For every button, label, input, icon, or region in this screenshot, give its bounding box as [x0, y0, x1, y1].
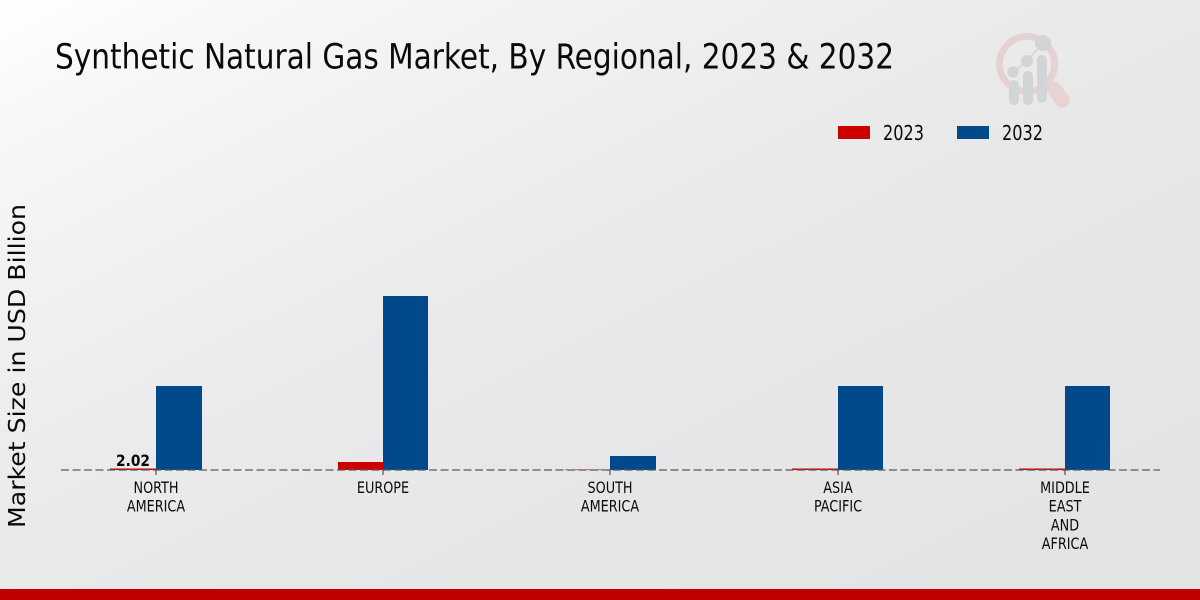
label: South America: SOUTH — [588, 478, 632, 497]
legend item: 2032 — [957, 121, 1043, 145]
label: Middle East and Africa: EAST — [1049, 497, 1082, 516]
x-axis category labels — [127, 478, 1090, 553]
bars: South America — [565, 456, 656, 470]
legend item: 2032: 2032 — [1002, 121, 1043, 145]
bars: Middle East and Africa — [1019, 386, 1110, 470]
label: North America: NORTH — [134, 478, 178, 497]
bars: North America — [110, 386, 202, 470]
title: Synthetic Natural Gas Market, By Regional, 2023 & 2032 — [55, 38, 894, 78]
label: Middle East and Africa: MIDDLE — [1040, 478, 1090, 497]
icon: watermark logo magnifier with bars — [1000, 35, 1062, 105]
y-axis title: Market Size in USD Billion — [5, 204, 31, 528]
label: South America: AMERICA — [581, 497, 640, 516]
legend item: 2023: 2023 — [883, 121, 924, 145]
legend — [838, 121, 1043, 145]
legend item: 2023 — [838, 121, 924, 145]
bars: Europe — [338, 296, 428, 470]
footer bar — [0, 589, 1200, 600]
label: Asia Pacific: ASIA — [823, 478, 853, 497]
label: Middle East and Africa: AND — [1051, 516, 1079, 535]
bar chart — [61, 296, 1160, 475]
label: Middle East and Africa: AFRICA — [1042, 534, 1089, 553]
bars: Asia Pacific — [792, 386, 883, 470]
label: North America: AMERICA — [127, 497, 186, 516]
label: Asia Pacific: PACIFIC — [814, 497, 862, 516]
label: Europe: EUROPE — [357, 478, 409, 497]
data label: 2.02: 2.02 — [116, 451, 150, 470]
